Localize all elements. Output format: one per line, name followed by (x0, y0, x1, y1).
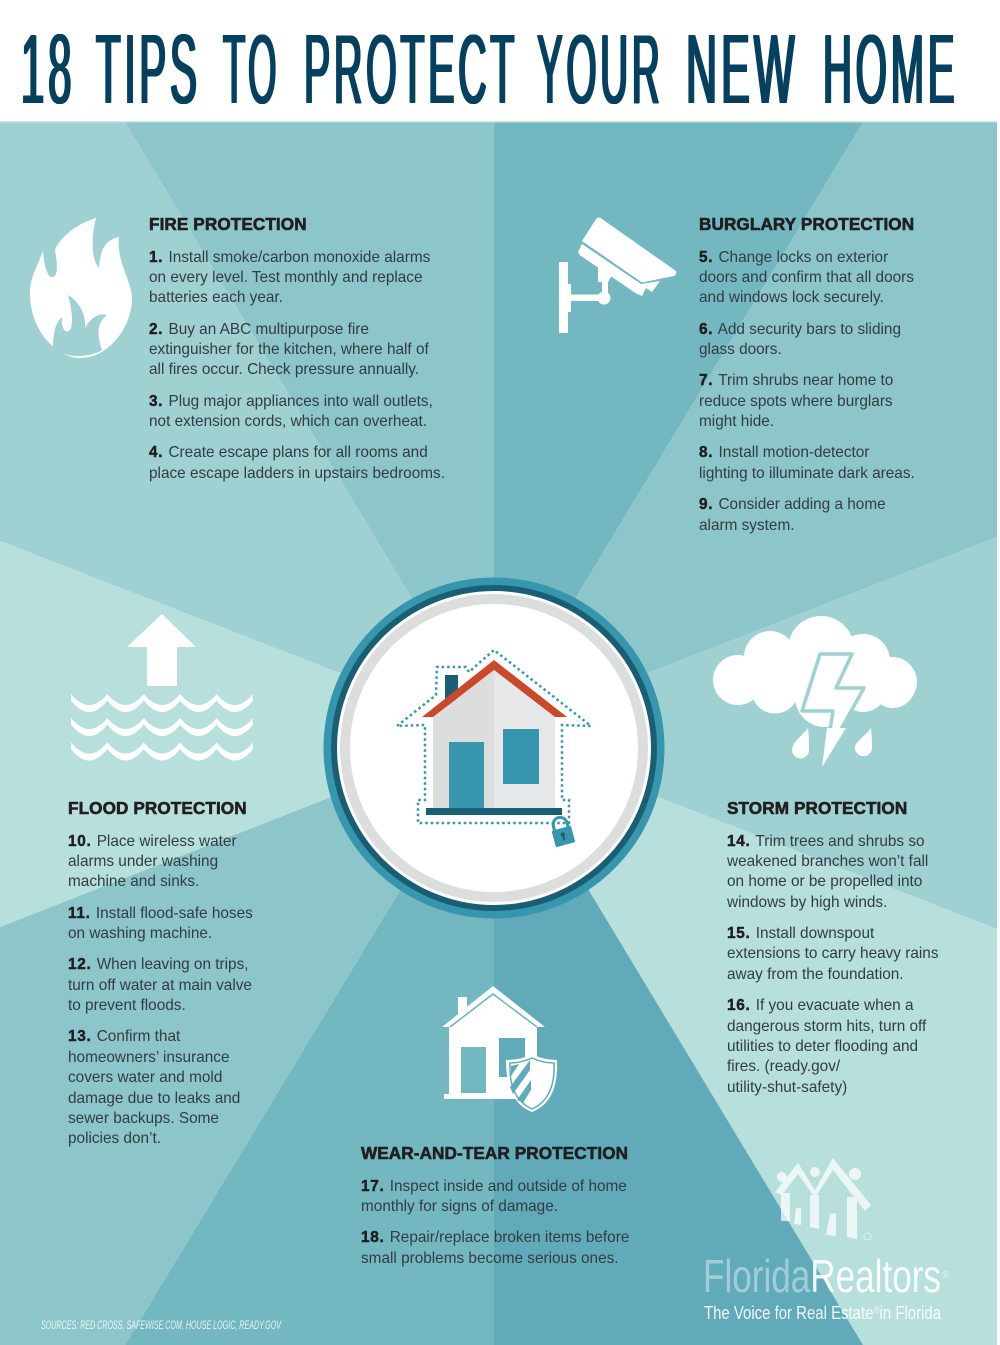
tip 3: not extension cords, which can overheat. (149, 413, 427, 430)
title: TIPS (96, 14, 201, 124)
tip 9: 9. Consider adding a home (699, 496, 886, 513)
tip 16: utilities to deter flooding and (727, 1038, 918, 1055)
tip 5: and windows lock securely. (699, 289, 884, 306)
tip 12: 12. When leaving on trips, (68, 956, 249, 973)
tip 13: 13. Confirm that (68, 1028, 180, 1045)
tip 7: 7. Trim shrubs near home to (699, 372, 893, 389)
tip 17: monthly for signs of damage. (361, 1198, 558, 1215)
tip 1: batteries each year. (149, 289, 283, 306)
tip 11 (68, 905, 253, 942)
tip 11: 11. Install flood-safe hoses (68, 905, 253, 922)
tip 10: alarms under washing (68, 853, 218, 870)
tip 15: 15. Install downspout (727, 925, 874, 942)
tip 12 (68, 956, 252, 1014)
tip 12: to prevent floods. (68, 997, 186, 1014)
tip 5: doors and confirm that all doors (699, 269, 914, 286)
icon: flame (30, 218, 132, 358)
lightning tip (822, 728, 846, 767)
tip 13: covers water and mold (68, 1069, 222, 1086)
tip 2: 2. Buy an ABC multipurpose fire (149, 321, 369, 338)
tip 1 (149, 248, 430, 306)
tip 6: glass doors. (699, 341, 782, 358)
tip 13: homeowners’ insurance (68, 1049, 229, 1066)
tip 17 (361, 1178, 627, 1215)
heading: fire protection: FIRE PROTECTION (149, 214, 307, 234)
tip 10: machine and sinks. (68, 873, 199, 890)
logo: Florida Realtors: ® (942, 1270, 950, 1281)
tip 5: 5. Change locks on exterior (699, 248, 888, 266)
tip 1: 1. Install smoke/carbon monoxide alarms (149, 248, 430, 266)
tip 4: 4. Create escape plans for all rooms and (149, 444, 428, 461)
logo: Florida Realtors: FloridaRealtors (703, 1250, 941, 1302)
tip 4 (149, 444, 445, 482)
tip 16 (727, 997, 926, 1096)
tip 6: 6. Add security bars to sliding (699, 321, 901, 338)
tip 4: place escape ladders in upstairs bedrooms. (149, 465, 445, 482)
tip 10 (68, 832, 237, 890)
tip 6 (699, 321, 901, 358)
tip 5 (699, 248, 914, 306)
tip 18: 18. Repair/replace broken items before (361, 1229, 629, 1246)
heading: wear-and-tear protection: WEAR-AND-TEAR PROTECTION (361, 1143, 628, 1163)
tip 12: turn off water at main valve (68, 977, 252, 994)
tip 9 (699, 496, 886, 534)
panel: storm protection (727, 798, 939, 1096)
panel: wear-and-tear protection (360, 1143, 629, 1267)
heading: burglary protection: BURGLARY PROTECTION (699, 214, 914, 234)
tip 15 (727, 925, 939, 983)
tip 13: sewer backups. Some (68, 1110, 219, 1127)
tip 14: windows by high winds. (727, 894, 887, 911)
tip 16: 16. If you evacuate when a (727, 997, 914, 1014)
tip 15: away from the foundation. (727, 966, 904, 983)
icon: padlock (549, 815, 575, 847)
icon: flood arrow and waves (71, 614, 253, 760)
tip 3: 3. Plug major appliances into wall outlets, (149, 393, 433, 410)
tip 2: all fires occur. Check pressure annually. (149, 361, 419, 378)
panel: fire protection (149, 214, 445, 482)
heading: flood protection: FLOOD PROTECTION (68, 798, 247, 818)
tip 7 (699, 372, 893, 430)
sources note: SOURCES: RED CROSS, SAFEWISE.COM, HOUSE LOGIC, READY.GOV (41, 1318, 282, 1332)
logo: Florida Realtors: The Voice for Real Estate (704, 1303, 908, 1323)
icon: storm cloud with lightning (713, 616, 917, 767)
tip 13: policies don’t. (68, 1130, 161, 1147)
tip 18: small problems become serious ones. (361, 1250, 619, 1267)
title: NEW (686, 14, 798, 124)
title (21, 14, 958, 124)
tip 7: reduce spots where burglars (699, 393, 893, 410)
tip 2 (149, 321, 429, 378)
tip 14: weakened branches won’t fall (727, 853, 928, 870)
tip 11: on washing machine. (68, 925, 212, 942)
tip 14 (727, 832, 928, 911)
tip 16: dangerous storm hits, turn off (727, 1018, 926, 1035)
icon: security camera (559, 218, 676, 333)
tip 17: 17. Inspect inside and outside of home (361, 1178, 627, 1194)
icon: house with shield (442, 986, 557, 1112)
tip 3 (149, 393, 433, 430)
tip 13: damage due to leaks and (68, 1090, 240, 1107)
heading: storm protection: STORM PROTECTION (727, 798, 907, 818)
tip 14: 14. Trim trees and shrubs so (727, 832, 925, 850)
tip 13 (68, 1028, 240, 1147)
tip 18 (361, 1229, 629, 1267)
tip 8: 8. Install motion-detector (699, 444, 869, 461)
panel: flood protection (68, 798, 253, 1147)
logo: Florida Realtors: ® (873, 1305, 880, 1316)
tip 2: extinguisher for the kitchen, where half of (149, 341, 429, 358)
tip 7: might hide. (699, 413, 774, 430)
tip 1: on every level. Test monthly and replace (149, 269, 422, 286)
title: PROTECT (304, 14, 518, 124)
logo: Florida Realtors: in Florida (880, 1303, 942, 1323)
logo: Florida Realtors (703, 1158, 950, 1323)
tip 10: 10. Place wireless water (68, 832, 237, 850)
tip 15: extensions to carry heavy rains (727, 945, 939, 962)
tip 8: lighting to illuminate dark areas. (699, 465, 915, 482)
tip 9: alarm system. (699, 517, 794, 534)
tip 8 (699, 444, 915, 482)
icon: house with dotted security outline (397, 650, 591, 823)
title: YOUR (537, 14, 663, 124)
center medallion (324, 578, 664, 918)
tip 16: fires. (ready.gov/ (727, 1058, 840, 1075)
panel: burglary protection (699, 214, 915, 534)
tip 16: utility-shut-safety) (727, 1079, 847, 1096)
title: HOME (823, 14, 958, 124)
title: TO (223, 14, 280, 124)
title: 18 (21, 14, 75, 124)
tip 14: on home or be propelled into (727, 873, 922, 890)
